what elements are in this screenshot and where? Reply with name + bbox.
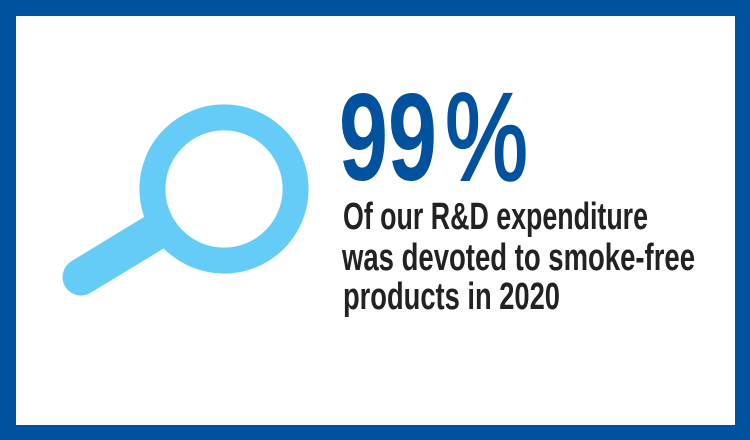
description text: products in 2020 <box>343 276 560 318</box>
headline statistic: 99%: % <box>445 69 528 207</box>
description text <box>341 196 695 318</box>
headline statistic: 99%: 99 <box>339 69 437 207</box>
icon: magnifying glass <box>81 117 296 277</box>
